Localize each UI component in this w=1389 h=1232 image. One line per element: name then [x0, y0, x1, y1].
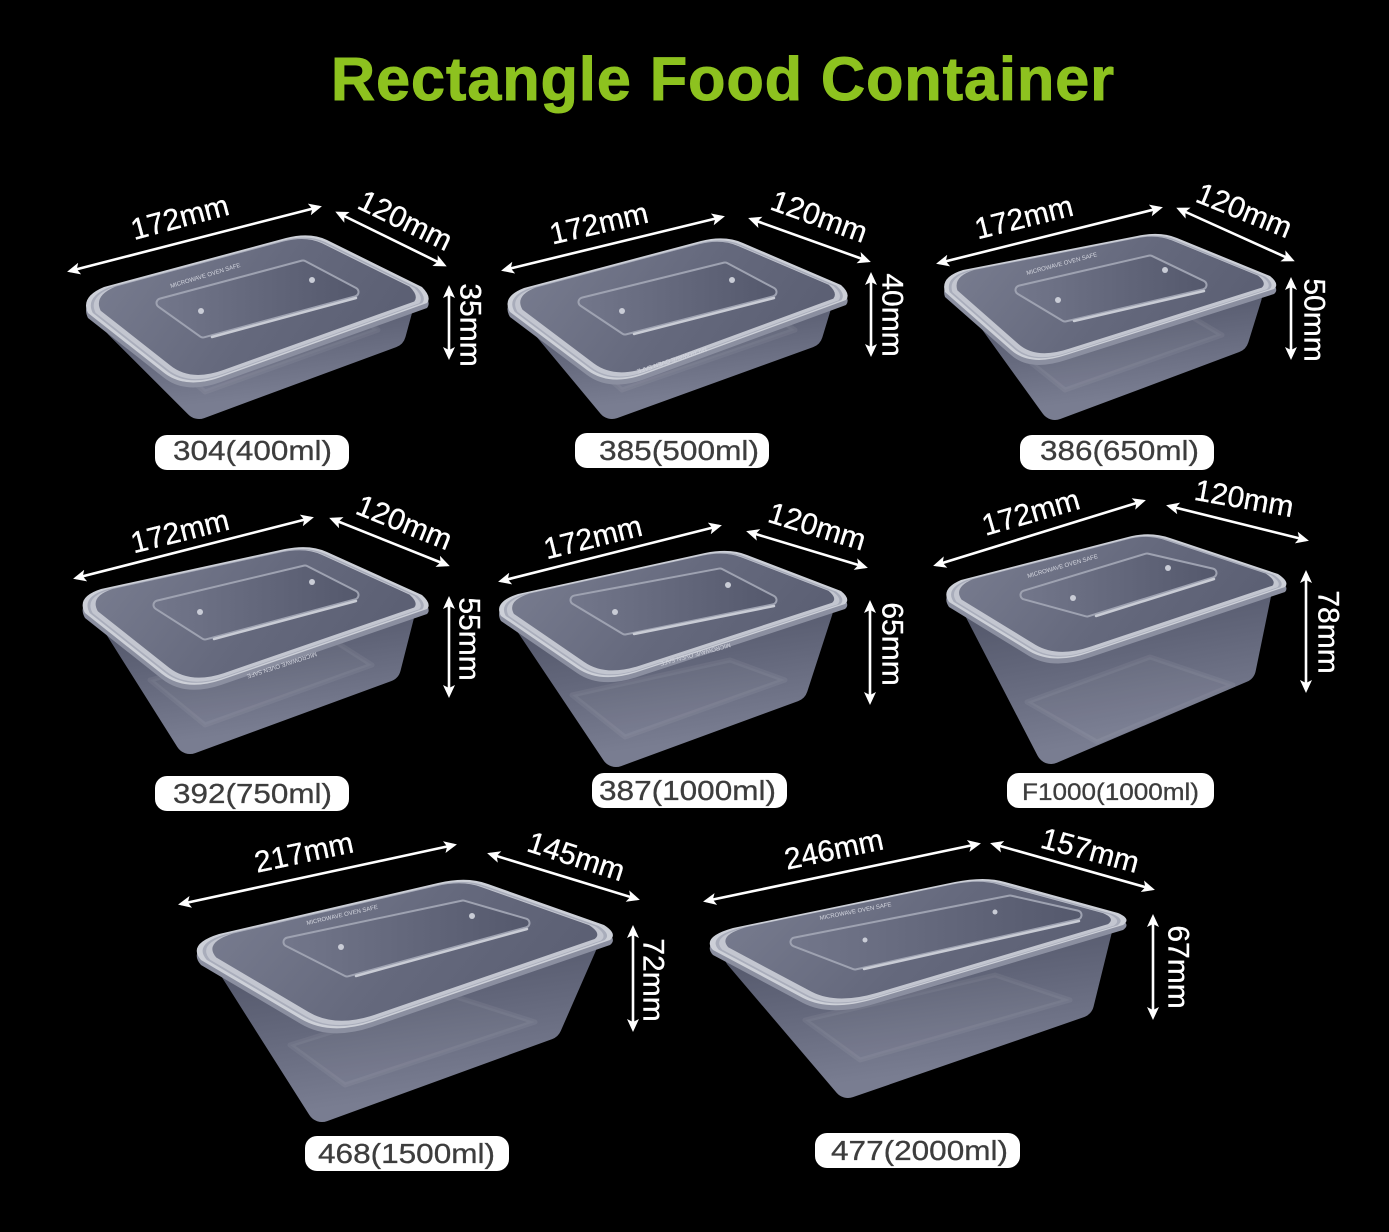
container 385	[507, 238, 848, 404]
width arrow 172mm: 172mm	[978, 483, 1084, 543]
height arrow 78mm: 78mm	[1312, 590, 1344, 674]
label F1000(1000ml)	[1007, 773, 1214, 808]
height arrow 50mm: 50mm	[1298, 278, 1330, 362]
depth arrow 120mm	[1169, 474, 1306, 540]
width arrow 172mm: 172mm	[540, 510, 646, 566]
width arrow 246mm	[706, 823, 978, 901]
depth arrow 145mm: 145mm	[523, 826, 629, 888]
width arrow 172mm: 172mm	[127, 504, 233, 560]
height arrow 35mm: 35mm	[454, 283, 486, 367]
container 386: MICROWAVE OVEN SAFE	[1026, 252, 1098, 277]
label 387(1000ml): 387(1000ml)	[599, 775, 776, 806]
label 392(750ml)	[155, 776, 349, 811]
label 477(2000ml): 477(2000ml)	[831, 1135, 1008, 1166]
depth arrow 120mm: 120mm	[1191, 177, 1297, 245]
depth arrow 157mm	[993, 822, 1152, 889]
width arrow 172mm: 172mm	[127, 189, 233, 247]
depth arrow 120mm: 120mm	[351, 489, 457, 557]
height arrow 67mm: 67mm	[1162, 925, 1194, 1009]
label 477(2000ml)	[815, 1133, 1020, 1168]
panel: 392 (750ml)	[76, 489, 486, 811]
panel: 468 (1500ml)	[181, 826, 670, 1171]
depth arrow 120mm: 120mm	[1192, 474, 1296, 524]
label 385(500ml): 385(500ml)	[599, 435, 759, 466]
depth arrow 120mm: 120mm	[766, 184, 872, 250]
panel: 304 (400ml)	[70, 184, 486, 470]
container 304	[86, 235, 429, 404]
label F1000(1000ml): F1000(1000ml)	[1022, 779, 1199, 806]
container 304: MICROWAVE OVEN SAFE	[170, 263, 241, 290]
depth arrow 157mm: 157mm	[1037, 822, 1143, 880]
width arrow 172mm	[70, 189, 319, 271]
width arrow 172mm	[501, 510, 719, 581]
label 392(750ml): 392(750ml)	[173, 778, 332, 809]
width arrow 172mm: 172mm	[971, 190, 1077, 246]
container 392: MICROWAVE OVEN SAFE	[246, 650, 317, 678]
panel: 477 (2000ml)	[706, 822, 1194, 1168]
container 468: MICROWAVE OVEN SAFE	[306, 905, 379, 927]
container 477	[710, 879, 1127, 1083]
width arrow 217mm	[181, 826, 454, 904]
height arrow 72mm: 72mm	[636, 938, 670, 1022]
container F1000: MICROWAVE OVEN SAFE	[1027, 554, 1099, 580]
label 385(500ml)	[575, 433, 769, 468]
label 304(400ml)	[155, 435, 349, 470]
panel: 385 (500ml)	[504, 184, 908, 468]
container 468	[197, 880, 613, 1107]
label 386(650ml)	[1020, 435, 1214, 470]
width arrow 217mm: 217mm	[252, 826, 356, 880]
container 385: MICROWAVE OVEN SAFE	[636, 345, 707, 373]
panel: 386 (650ml)	[939, 177, 1330, 470]
label 468(1500ml): 468(1500ml)	[318, 1138, 495, 1169]
container 477: MICROWAVE OVEN SAFE	[819, 902, 892, 922]
width arrow 172mm	[76, 504, 311, 578]
panel: 387 (1000ml)	[499, 497, 908, 808]
container 392	[83, 547, 429, 739]
height arrow 55mm: 55mm	[452, 597, 486, 681]
width arrow 172mm	[939, 190, 1160, 263]
width arrow 246mm: 246mm	[782, 823, 886, 877]
label 468(1500ml)	[305, 1136, 509, 1171]
label 386(650ml): 386(650ml)	[1040, 435, 1199, 466]
height arrow 65mm: 65mm	[876, 602, 908, 686]
width arrow 172mm	[504, 197, 722, 270]
title: Rectangle Food Container	[331, 45, 1114, 113]
depth arrow 120mm: 120mm	[764, 497, 870, 557]
depth arrow 120mm: 120mm	[353, 184, 457, 258]
width arrow 172mm	[936, 483, 1143, 565]
container F1000	[946, 534, 1286, 749]
width arrow 172mm: 172mm	[547, 197, 651, 251]
label 304(400ml): 304(400ml)	[173, 435, 332, 466]
height arrow 40mm: 40mm	[876, 273, 908, 357]
depth arrow 145mm	[490, 826, 637, 899]
container 387: MICROWAVE OVEN SAFE	[659, 641, 731, 666]
height arrow 78mm	[1306, 573, 1344, 690]
container 386	[944, 234, 1276, 405]
height arrow 67mm	[1153, 917, 1194, 1017]
container 387	[499, 551, 847, 752]
panel: F1000 (1000ml)	[936, 474, 1344, 808]
